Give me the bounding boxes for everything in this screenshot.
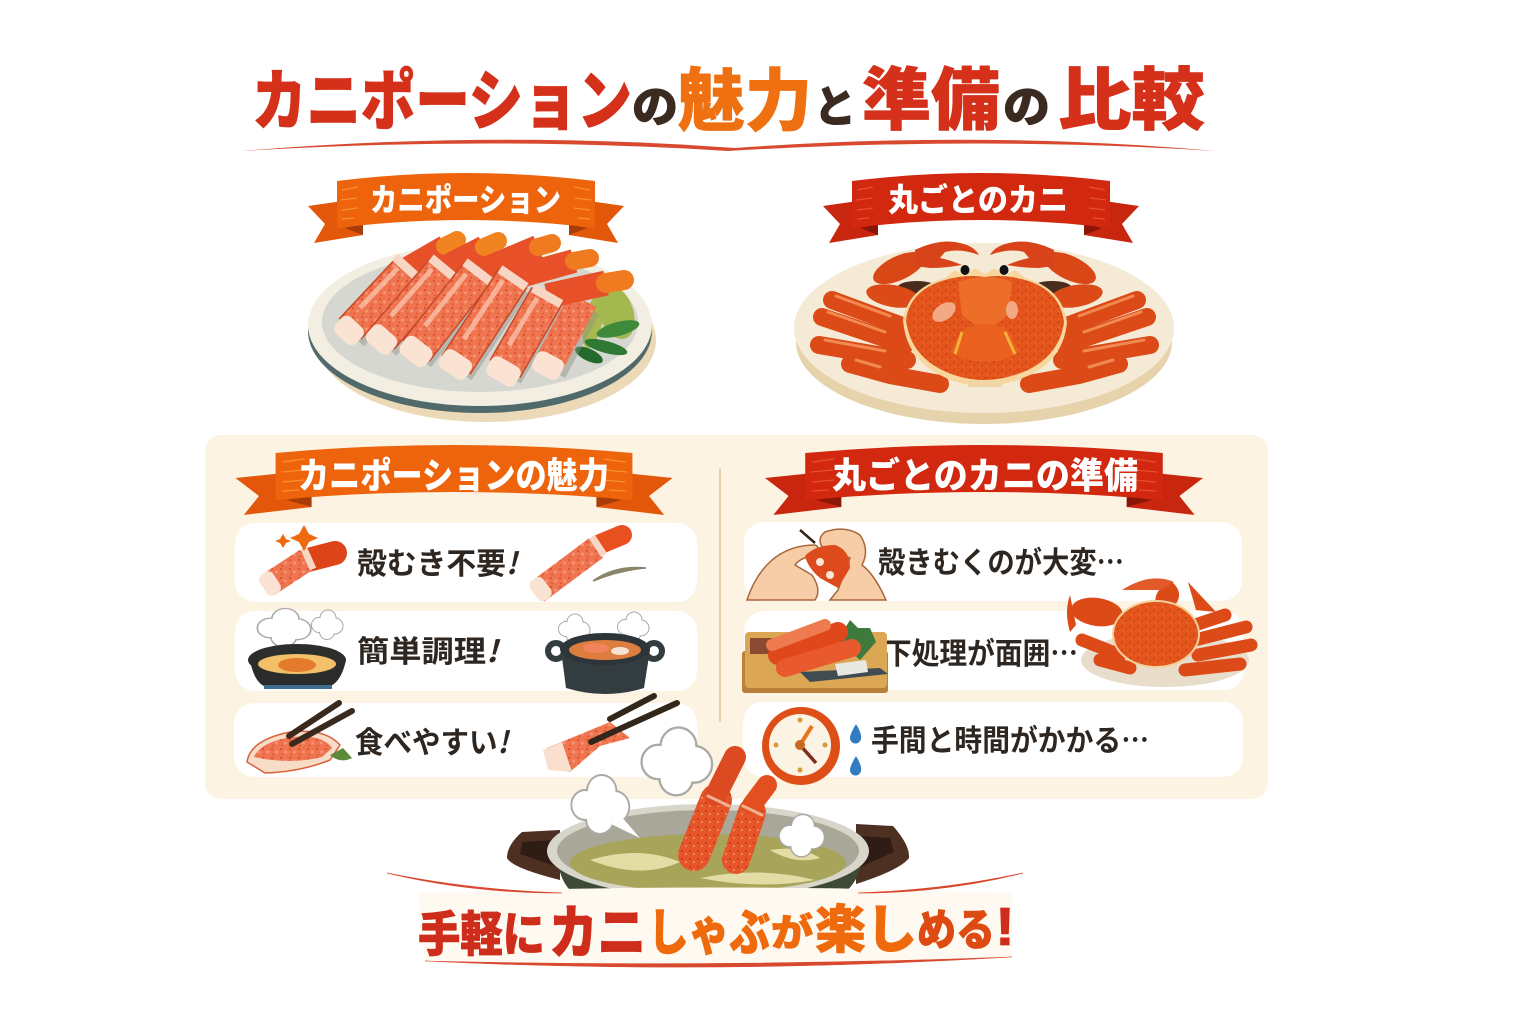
icon: steaming pot: [548, 612, 662, 694]
ribbon: カニポーション: [308, 173, 624, 243]
panel: comparison background: [205, 435, 1268, 799]
bottom message: が: [771, 912, 813, 955]
steam clouds: [572, 729, 824, 856]
ribbon: 丸ごとのカニの準備: [765, 445, 1203, 515]
icon: hands peeling crab: [747, 529, 886, 600]
bottom message: 楽し: [815, 902, 917, 960]
icon: crab piece with chopsticks: [543, 696, 677, 772]
bottom message: 手軽に: [418, 909, 545, 962]
bottom message: しゃぶ: [648, 905, 770, 961]
leg shadow: [353, 275, 586, 376]
row text: 簡単調理: 簡単調理 !: [357, 627, 501, 671]
illustration: hot pot: [507, 757, 909, 900]
bottom message: カニ: [549, 901, 646, 966]
icon: crab leg with sparkles: [257, 525, 335, 598]
bottom message: [418, 897, 1015, 966]
ribbon: 丸ごとのカニの準備: 丸ごとのカニの準備: [832, 455, 1138, 496]
panel: right rows: [743, 522, 1244, 777]
row text: 手間と時間がかかる: 手間と時間がかかる…: [871, 716, 1149, 760]
panel: left rows: [234, 523, 697, 777]
bottom message: める: [917, 906, 995, 955]
title: の: [632, 83, 678, 132]
banner line top: [387, 873, 1023, 893]
leaves: [573, 280, 642, 367]
ribbon: 丸ごとのカニ: [823, 173, 1139, 243]
bottom message: !: [995, 897, 1015, 957]
banner line bottom: [425, 957, 1012, 967]
icon: crab with chopsticks: [247, 703, 352, 773]
illustration: crab portions on plate: [308, 240, 656, 422]
crab legs in pot: [694, 757, 767, 860]
row text: 殻むき不要: 殻むき不要!: [357, 539, 520, 583]
crab legs: [331, 240, 624, 389]
row text: 殻きむくのが大変: 殻きむくのが大変…: [878, 538, 1124, 582]
ribbon: 丸ごとのカニ: 丸ごとのカニ: [888, 182, 1068, 218]
ribbon: カニポーションの魅力: カニポーションの魅力: [298, 455, 609, 496]
title: 比較: [1058, 63, 1205, 139]
row text: 下処理が面囲: 下処理が面囲…: [884, 629, 1078, 673]
title: の: [1003, 83, 1050, 132]
illustration: whole crab on plate: [794, 242, 1174, 424]
title: カニポーション: [252, 64, 632, 138]
icon: clock: [762, 707, 840, 785]
banner background: [418, 888, 1012, 966]
icon: steaming pan: [248, 609, 346, 689]
icon: sweat drops: [850, 724, 861, 776]
crab shell: [903, 268, 1067, 386]
icon: crab leg with swoosh: [527, 535, 646, 603]
left legs and claw: [819, 242, 979, 384]
ribbon: カニポーション: カニポーション: [370, 182, 561, 218]
title: 準備: [862, 63, 1000, 139]
icon: cutting board with knife: [742, 620, 888, 693]
ribbon: カニポーションの魅力: [235, 445, 673, 515]
title: [252, 63, 1205, 140]
title: 魅力: [678, 64, 812, 140]
row text: 食べやすい: 食べやすい!: [355, 718, 511, 762]
title underline: [242, 140, 1216, 151]
title: と: [814, 83, 856, 132]
icon: small crab: [1067, 578, 1251, 687]
